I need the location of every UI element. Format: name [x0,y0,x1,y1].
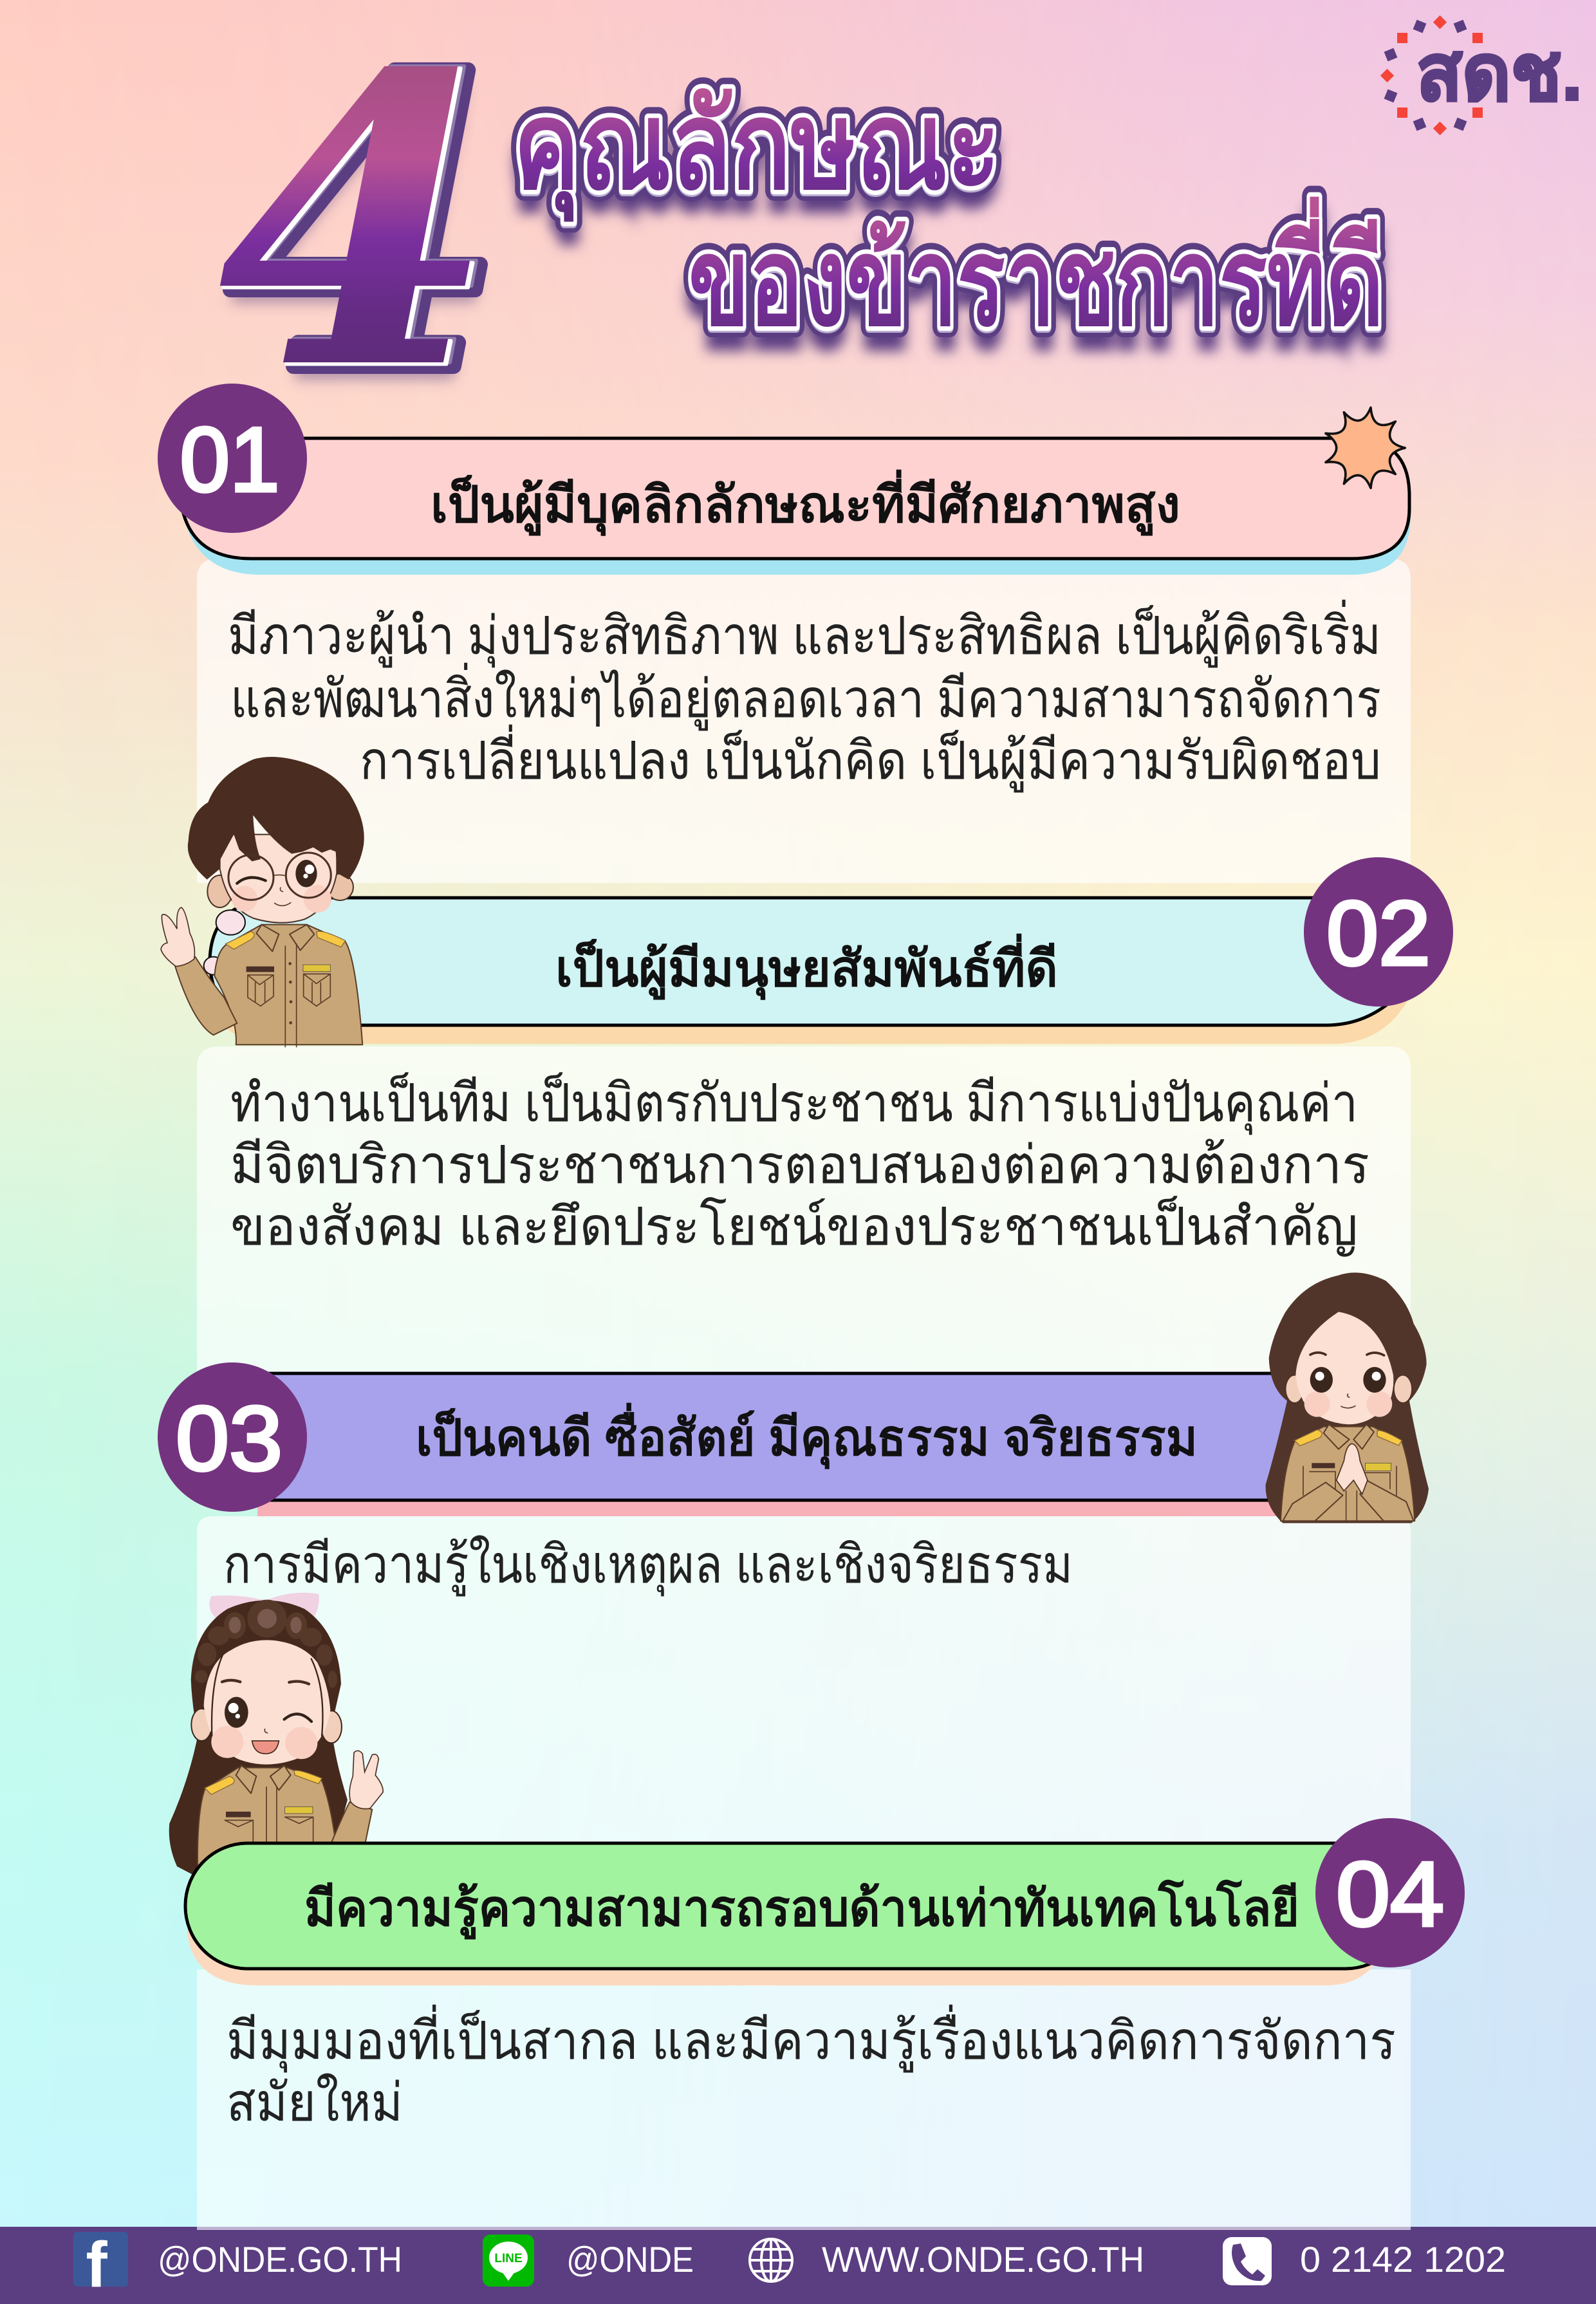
logo [1380,15,1582,135]
number badge 04: 04 [1336,1843,1444,1946]
number badge 02: 02 [1326,882,1431,985]
hair silhouette [169,1601,348,1877]
title 1 shadow: คุณลักษณะ [514,95,1000,239]
banner shadow 3 [257,1480,1313,1516]
cheeks [211,1726,243,1758]
section 4 text [227,2004,1396,2132]
hair [188,757,364,880]
banner shape 4 [185,1843,1408,1969]
title line 2 [689,197,1384,369]
sparkle props [204,910,245,975]
panel: card 3 body [197,1516,1411,1843]
facebook handle: @ONDE.GO.TH [158,2239,402,2280]
braid lumps [195,1600,337,1688]
section 3 text: การมีความรู้ในเชิงเหตุผล และเชิงจริยธรรม [223,1536,1073,1597]
icon: line [483,2234,534,2287]
ears [191,1709,212,1741]
section 3 banner [158,1362,1313,1516]
icon: facebook [73,2229,128,2301]
website: WWW.ONDE.GO.TH [822,2239,1144,2280]
banner shape 1 [183,438,1409,559]
number badge 04 [1315,1818,1465,1967]
panel: card 2 body [197,1046,1411,1372]
mouth [252,1741,279,1754]
section 2 banner [200,857,1453,1044]
face [204,1640,330,1765]
banner shape 2 [210,898,1403,1025]
banner shadow 4 [187,1931,1390,1985]
title 1 bevel: คุณลักษณะ [514,80,1000,224]
eyes [1310,1353,1384,1355]
badges [225,1787,313,1843]
cheeks [232,886,257,912]
torso [198,1768,336,1877]
character: boy with glasses [161,757,364,1047]
eyes and mouth [237,877,266,884]
heading 4: มีความรู้ความสามารถรอบด้านเท่าทันเทคโนโลยี [304,1879,1299,1940]
hair strands [212,1652,322,1736]
glasses [228,855,274,900]
icon: line: LINE [494,2252,523,2265]
number badge 02 [1304,857,1453,1007]
banner shadow 1 [183,515,1411,575]
icon: star burst [1326,407,1405,488]
section 1 text [228,599,1381,792]
phone number: 0 2142 1202 [1300,2239,1506,2280]
title numeral 4 [218,0,505,474]
torso [1281,1427,1415,1521]
title 1 outline: คุณลักษณะ [514,78,1000,222]
nose [264,1729,268,1733]
raised hand [349,1751,383,1809]
title 1 fill: คุณลักษณะ [514,78,1000,222]
badges and pockets [1303,1463,1396,1521]
panel: card 1 body [197,559,1411,883]
character: woman with folded hands [1266,1272,1429,1523]
hair highlights [229,1609,302,1633]
folded arms [1283,1480,1414,1521]
folded hands [1337,1444,1368,1494]
section 1 banner [158,384,1411,575]
eyes [222,1680,309,1684]
epaulettes and collar [1295,1430,1322,1446]
section 2 text: มีจิตบริการประชาชนการตอบสนองต่อความต้องการ [230,1136,1369,1194]
section 1 text: มีภาวะผู้นำ มุ่งประสิทธิภาพ และประสิทธิผล เป็นผู้คิดริเริ่ม [228,599,1381,668]
torso [214,925,362,1045]
arm [175,957,237,1035]
heading 3: เป็นคนดี ซื่อสัตย์ มีคุณธรรม จริยธรรม [416,1402,1198,1469]
section 2 text: ทำงานเป็นทีม เป็นมิตรกับประชาชน มีการแบ่งปันคุณค่า [230,1072,1358,1135]
icon: phone [1223,2237,1272,2285]
title line 1 [514,78,1000,239]
section 4 text: มีมุมมองที่เป็นสากล และมีความรู้เรื่องแนวคิดการจัดการ [227,2004,1396,2073]
shirt details [248,944,330,1047]
ears [1286,1375,1304,1403]
number badge 03 [158,1362,307,1512]
line handle: @ONDE [566,2239,694,2280]
cheeks [1304,1391,1330,1417]
numeral extrusion: 4 [228,0,505,461]
section 4 banner [185,1818,1465,1985]
icon: facebook: f [86,2229,107,2301]
heading 1: เป็นผู้มีบุคลิกลักษณะที่มีศักยภาพสูง [431,469,1180,536]
character: woman with bow and peace sign [169,1593,383,1877]
face [220,835,337,923]
epaulettes and collar [205,1776,234,1794]
footer contacts [73,2229,1506,2301]
hand [161,907,194,967]
numeral white outline: 4 [221,0,498,459]
epaulettes and collar [226,931,254,949]
section 2 text: ของสังคม และยึดประโยชน์ของประชาชนเป็นสำคัญ [230,1195,1358,1257]
hair silhouette [1266,1272,1429,1523]
panel: card 4 body [197,1969,1411,2230]
number badge 01 [158,384,307,533]
bow [209,1593,319,1617]
section 4 text: สมัยใหม่ [227,2074,403,2132]
numeral gradient fill: 4 [218,0,495,457]
banner shape 3 [257,1373,1313,1500]
heading 2: เป็นผู้มีมนุษยสัมพันธ์ที่ดี [555,933,1058,1000]
number badge 01: 01 [180,409,279,511]
ears [207,875,232,907]
title 1 white outline: คุณลักษณะ [514,78,1000,222]
section 2 text [230,1072,1369,1257]
banner shadow 2 [200,965,1409,1044]
section 1 text: การเปลี่ยนแปลง เป็นนักคิด เป็นผู้มีความรับผิดชอบ [360,724,1381,792]
icon: globe [750,2239,792,2281]
logo ring of squares [1380,15,1483,135]
face [1295,1312,1393,1424]
footer bar [0,2227,1596,2304]
numeral blurred shadow: 4 [228,6,505,474]
section 1 text: และพัฒนาสิ่งใหม่ๆได้อยู่ตลอดเวลา มีความสามารถจัดการ [230,662,1381,730]
number badge 03: 03 [176,1388,283,1490]
raised arm [331,1802,372,1843]
logo wordmark: สดช. [1416,29,1582,116]
numeral lavender bevel: 4 [224,0,501,457]
nose and mouth [1341,1394,1355,1408]
